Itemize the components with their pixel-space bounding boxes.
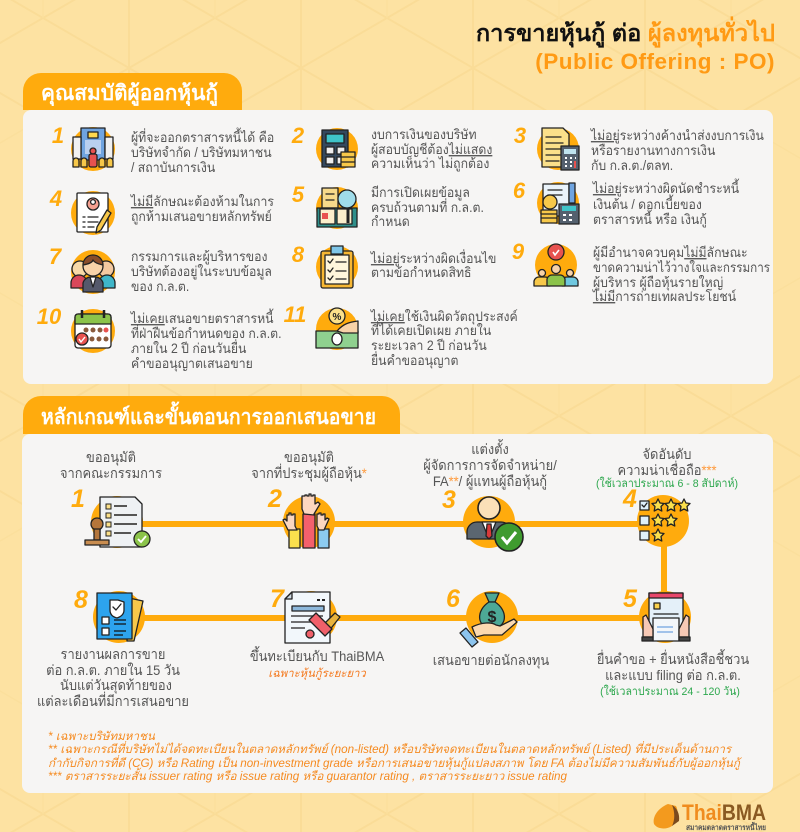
- step 3: แต่งตั้ง: [471, 438, 509, 457]
- heading: issuer qualifications: [23, 73, 242, 110]
- qualification 4: 4: [49, 186, 62, 211]
- qualification 2: [291, 123, 492, 172]
- step 4: ความน่าเชื่อถือ***: [618, 460, 717, 478]
- qualification 9: ขาดความน่าไว้วางใจและกรรมการ: [593, 260, 770, 275]
- qualification 5: 5: [292, 182, 305, 207]
- panel: issuer qualifications: [23, 73, 773, 384]
- qualification 3: หรือรายงานทางการเงิน: [591, 142, 716, 158]
- qualification 11: ระยะเวลา 2 ปี ก่อนวัน: [371, 337, 487, 353]
- icon: office building with people: [71, 127, 115, 171]
- qualification 7: ของ ก.ล.ต.: [131, 278, 189, 294]
- icon: profile document with pen: [71, 191, 115, 235]
- step 7: เฉพาะหุ้นกู้ระยะยาว: [268, 667, 366, 680]
- qualification 6: 6: [513, 178, 526, 203]
- qualification 8: [292, 242, 496, 288]
- qualification 7: กรรมการและผู้บริหารของ: [131, 248, 268, 265]
- footnotes: [48, 730, 742, 783]
- icon: hand offering money bag: $: [488, 609, 497, 626]
- qualification 3: 3: [514, 123, 526, 148]
- icon: hands holding filing documents: [639, 591, 691, 643]
- qualification 7: 7: [49, 244, 63, 269]
- footnotes: * เฉพาะบริษัทมหาชน: [48, 730, 156, 743]
- icon: raised hands: [283, 494, 335, 548]
- footnotes: ** เฉพาะกรณีที่บริษัทไม่ได้จดทะเบียนในตลาดหลักทรัพย์ (non-listed) หรือบริษัทจดทะเบียนในตลาดหลักทรัพย์ (Listed) ที่มีประเด็นด้านการ: [48, 741, 733, 756]
- icon: bill, coins and calculator: [537, 182, 579, 224]
- qualification 2: 2: [291, 123, 305, 148]
- qualification 3: กับ ก.ล.ต./ตลท.: [591, 157, 673, 173]
- heading: issuer qualifications: คุณสมบัติผู้ออกหุ้นกู้: [41, 81, 218, 107]
- qualification 5: กำหนด: [371, 213, 410, 229]
- icon: verified checklist report: [93, 591, 145, 643]
- qualification 7: บริษัทต้องอยู่ในระบบข้อมูล: [131, 263, 272, 280]
- qualification 10: ที่ฝ่าฝืนข้อกำหนดของ ก.ล.ต.: [131, 324, 282, 341]
- qualification 11: 11: [284, 302, 306, 327]
- step 6: 6: [446, 585, 461, 613]
- qualification 1: / สถาบันการเงิน: [131, 159, 215, 175]
- qualification 11: ยื่นคำขออนุญาต: [371, 351, 459, 369]
- qualification 1: ผู้ที่จะออกตราสารหนี้ได้ คือ: [131, 127, 274, 146]
- step 7: [250, 585, 384, 680]
- qualification 6: เงินต้น / ดอกเบี้ยของ: [593, 194, 702, 212]
- qualification 2: งบการเงินของบริษัท: [371, 126, 477, 142]
- footnotes: *** ตราสารระยะสั้น issuer rating หรือ issue rating หรือ guarantor rating , ตราสารระยะยาว issue rating: [48, 767, 568, 783]
- icon: advisor with check badge: [463, 496, 523, 551]
- qualification 11: [284, 302, 518, 369]
- step 7: 7: [270, 585, 285, 613]
- step 3: 3: [442, 486, 456, 514]
- qualification 4: ถูกห้ามเสนอขายหลักทรัพย์: [131, 208, 272, 225]
- step 1: [60, 450, 162, 548]
- step 5: [597, 585, 749, 698]
- icon: document, stamp and check: [85, 496, 150, 548]
- qualification 11: ที่ได้เคยเปิดเผย ภายใน: [371, 321, 491, 338]
- step 8: แต่ละเดือนที่มีการเสนอขาย: [37, 691, 189, 709]
- icon: calculator and coins: [316, 128, 358, 170]
- qualification 3: ไม่อยู่ระหว่างค้างนำส่งงบการเงิน: [590, 127, 764, 144]
- qualification 8: ไม่อยู่ระหว่างผิดเงื่อนไข: [370, 249, 496, 267]
- qualification 2: ความเห็นว่า ไม่ถูกต้อง: [371, 153, 489, 172]
- qualification 7: [49, 244, 272, 294]
- qualification 8: 8: [292, 242, 305, 267]
- step 3: [423, 438, 557, 551]
- step 4: 4: [622, 485, 637, 513]
- step 5: ยื่นคำขอ + ยื่นหนังสือชี้ชวน: [597, 648, 749, 667]
- title: [476, 16, 775, 74]
- icon: hand holding banknote with percent bubble: %: [333, 312, 342, 323]
- heading: criteria and offering steps: หลักเกณฑ์และขั้นตอนการออกเสนอขาย: [41, 401, 376, 429]
- qualification 9: ไม่มีการถ่ายเทผลประโยชน์: [592, 288, 736, 304]
- qualification 9: [512, 239, 770, 304]
- logo: ThaiBMA: สมาคมตลาดตราสารหนี้ไทย: [686, 821, 766, 832]
- logo: ThaiBMA: [654, 800, 766, 832]
- icon: star rating checklist: [637, 495, 690, 547]
- step 1: ขออนุมัติ: [86, 450, 136, 466]
- step 8: นับแต่วันสุดท้ายของ: [60, 678, 172, 694]
- step 4: [596, 447, 738, 547]
- icon: three executives: [71, 250, 115, 294]
- qualification 5: [292, 182, 484, 229]
- qualification 1: บริษัทจำกัด / บริษัทมหาชน: [131, 144, 272, 160]
- icon: registration document and stamp: [285, 591, 340, 643]
- qualification 4: ไม่มีลักษณะต้องห้ามในการ: [130, 193, 274, 209]
- title: (Public Offering : PO): [535, 49, 775, 74]
- qualification 10: [37, 304, 282, 372]
- qualification 9: ผู้บริหาร ผู้ถือหุ้นรายใหญ่: [593, 274, 723, 291]
- step 8: รายงานผลการขาย: [61, 647, 165, 662]
- qualification 9: ผู้มีอำนาจควบคุมไม่มีลักษณะ: [593, 244, 748, 261]
- footnotes: กำกับกิจการที่ดี (CG) หรือ Rating เป็น non-investment grade หรือการเสนอขายหุ้นกู้แปลงสภาพ โดย FA ต้องไม่มีความสัมพันธ์กับผู้ออกหุ้นกู้: [48, 755, 742, 771]
- icon: calendar: [71, 309, 115, 353]
- heading: criteria and offering steps: [23, 396, 400, 434]
- qualification 10: ภายใน 2 ปี ก่อนวันยื่น: [131, 339, 247, 356]
- icon: clipboard checklist: [316, 246, 358, 288]
- step 8: ต่อ ก.ล.ต. ภายใน 15 วัน: [46, 661, 180, 678]
- step 3: ผู้จัดการการจัดจำหน่าย/: [423, 458, 557, 474]
- qualification 9: 9: [512, 239, 525, 264]
- qualification 11: ไม่เคยใช้เงินผิดวัตถุประสงค์: [370, 308, 518, 325]
- step 5: (ใช้เวลาประมาณ 24 - 120 วัน): [600, 685, 740, 698]
- qualification 10: คำขออนุญาตเสนอขาย: [131, 355, 253, 372]
- step 6: [433, 585, 549, 669]
- step 4: จัดอันดับ: [643, 447, 691, 462]
- qualification 10: 10: [37, 304, 62, 329]
- step 8: [37, 586, 189, 709]
- step 2: 2: [267, 485, 282, 513]
- title: การขายหุ้นกู้ ต่อ ผู้ลงทุนทั่วไป: [476, 16, 775, 48]
- qualification 6: ตราสารหนี้ หรือ เงินกู้: [593, 209, 707, 228]
- icon: hand holding banknote with percent bubble: [316, 308, 358, 350]
- icon: controlling persons with checkmark: [534, 244, 578, 286]
- qualification 1: [52, 123, 274, 175]
- step 5: 5: [623, 585, 638, 613]
- step 1: 1: [71, 485, 85, 513]
- step 6: เสนอขายต่อนักลงทุน: [433, 653, 549, 669]
- step 1: จากคณะกรรมการ: [60, 466, 162, 481]
- qualification 5: ครบถ้วนตามที่ ก.ล.ต.: [371, 198, 484, 215]
- icon: financial report with calculator: [537, 128, 579, 170]
- qualification 8: ตามข้อกำหนดสิทธิ: [371, 264, 472, 280]
- step 3: FA**/ ผู้แทนผู้ถือหุ้นกู้: [433, 474, 547, 490]
- step 2: [251, 450, 368, 548]
- qualification 10: ไม่เคยเสนอขายตราสารหนี้: [130, 308, 274, 326]
- qualification 2: ผู้สอบบัญชีต้องไม่แสดง: [371, 141, 492, 158]
- step 4: (ใช้เวลาประมาณ 6 - 8 สัปดาห์): [596, 477, 738, 490]
- qualification 5: มีการเปิดเผยข้อมูล: [371, 184, 470, 201]
- qualification 6: [513, 178, 740, 228]
- panel: criteria and offering steps: [22, 396, 773, 793]
- step 5: และแบบ filing ต่อ ก.ล.ต.: [605, 668, 741, 683]
- icon: data books and magnifier: [316, 187, 358, 229]
- qualification 1: 1: [52, 123, 64, 148]
- qualification 4: [49, 186, 274, 235]
- step 2: จากที่ประชุมผู้ถือหุ้น*: [251, 463, 368, 482]
- step 8: 8: [74, 586, 88, 614]
- qualification 3: [514, 123, 764, 173]
- logo: ThaiBMA: ThaiBMA: [682, 800, 766, 825]
- step 7: ขึ้นทะเบียนกับ ThaiBMA: [250, 645, 384, 664]
- step 2: ขออนุมัติ: [284, 450, 334, 466]
- qualification 6: ไม่อยู่ระหว่างผิดนัดชำระหนี้: [592, 178, 740, 197]
- process connector line: [117, 524, 664, 618]
